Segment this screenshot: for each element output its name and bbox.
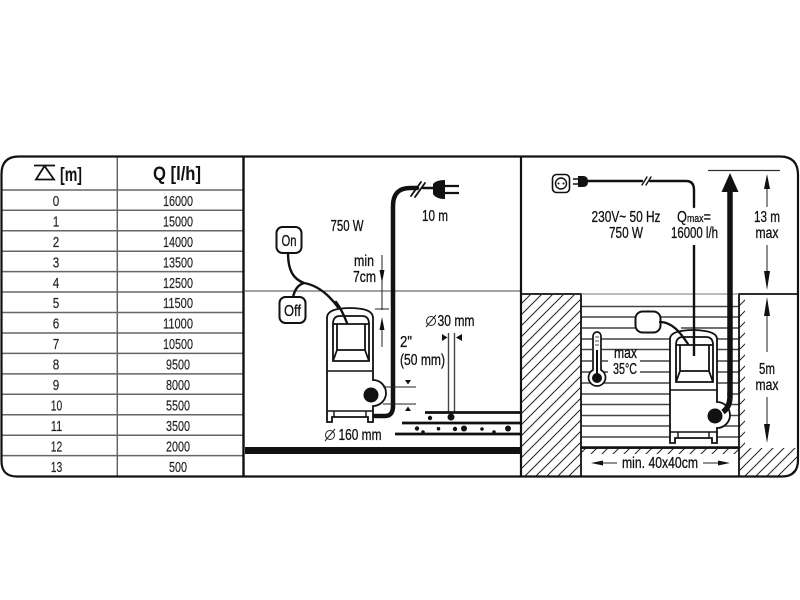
dimension: minimum basin size: min. 40x40cm — [622, 455, 698, 472]
inner float wire — [336, 302, 347, 323]
table column: head in metres: 7 — [53, 337, 59, 353]
table column: flow in litres per hour: 15000 — [163, 214, 193, 230]
dimension: min 7 cm — [353, 253, 389, 347]
table column: head in metres: 5 — [53, 296, 59, 312]
float switch Off — [280, 297, 306, 323]
label: max temperature: max — [614, 345, 637, 362]
ground hatching — [522, 295, 798, 476]
dimension: 5 m max: 5m — [759, 361, 775, 378]
label: cable length: 10 m — [422, 208, 448, 225]
pump — [327, 308, 386, 422]
table column: flow in litres per hour: 13500 — [163, 256, 193, 272]
basin outline — [522, 294, 798, 476]
table column: head in metres — [51, 194, 62, 476]
table column: flow in litres per hour: 12500 — [163, 276, 193, 292]
table column: flow in litres per hour: 9500 — [166, 358, 190, 374]
table column: flow in litres per hour: 2000 — [166, 440, 190, 456]
table column: flow in litres per hour: 8000 — [166, 378, 190, 394]
label: maximum flow: Qmax= — [677, 209, 711, 226]
table column: head in metres: 13 — [51, 460, 62, 476]
icon: water level triangle — [34, 166, 55, 180]
label: power: 750 W — [330, 218, 364, 235]
label: maximum flow: 16000 l/h — [671, 225, 718, 242]
dimension: 13 m max: max — [756, 225, 778, 242]
dimension: 5 m max: max — [756, 377, 778, 394]
dimension: minimum diameter 30 mm: 30 mm — [438, 313, 474, 330]
table column: flow in litres per hour: 500 — [169, 460, 187, 476]
table column: head in metres: 6 — [53, 316, 59, 332]
label: voltage and power: 750 W — [609, 225, 644, 242]
dimension: 13 m max — [754, 174, 780, 290]
dimension: 2 inch outlet — [383, 334, 445, 411]
table header: [m] — [60, 165, 82, 186]
label: voltage and power — [592, 209, 660, 242]
table column: head in metres: 2 — [53, 235, 59, 251]
float switch wires — [288, 253, 347, 323]
dimension: 2 inch outlet: 2" — [400, 334, 412, 351]
water level lines — [581, 306, 739, 437]
table column: head in metres: 12 — [51, 440, 62, 456]
table column: head in metres: 0 — [53, 194, 59, 210]
dimension: minimum diameter 30 mm — [426, 313, 474, 412]
dimension: 13 m max: 13 m — [754, 209, 780, 226]
table column: flow in litres per hour: 10500 — [163, 337, 193, 353]
icon: thermometer — [588, 332, 606, 386]
thick floor bar — [245, 447, 520, 454]
arrow: discharge head — [722, 173, 738, 412]
dimension: 5 m max — [756, 297, 778, 443]
float switch On — [276, 227, 302, 253]
table column: head in metres: 3 — [53, 256, 59, 272]
label: pump width 160 mm — [325, 427, 382, 444]
outer frame with panel dividers — [2, 156, 798, 477]
dimension: min 7 cm: min — [354, 253, 374, 270]
power cable into pump — [693, 245, 695, 356]
socket and plug cable — [552, 174, 694, 207]
table header: Q [l/h] — [153, 164, 201, 185]
label: max temperature — [613, 345, 637, 378]
table column: flow in litres per hour: 5500 — [166, 398, 190, 414]
table column: flow in litres per hour: 16000 — [163, 194, 193, 210]
float switch Off: Off — [284, 303, 301, 320]
label: max temperature: 35°C — [613, 361, 637, 378]
pump — [670, 330, 730, 443]
table column: flow in litres per hour: 14000 — [163, 235, 193, 251]
sediment layers — [395, 412, 520, 434]
table column: head in metres: 11 — [51, 419, 62, 435]
float wire — [660, 322, 688, 344]
label: maximum flow — [671, 209, 718, 242]
panel: flow table — [2, 157, 243, 476]
table column: head in metres: 8 — [53, 358, 59, 374]
table column: head in metres: 9 — [53, 378, 59, 394]
label: pump width 160 mm: 160 mm — [338, 427, 382, 444]
dimension: min 7 cm: 7cm — [353, 269, 376, 286]
table column: flow in litres per hour — [163, 194, 193, 476]
table column: head in metres: 4 — [53, 276, 59, 292]
panel: well installation — [522, 170, 798, 476]
table column: head in metres: 1 — [53, 214, 59, 230]
dimension: 2 inch outlet: (50 mm) — [400, 352, 445, 369]
table column: flow in litres per hour: 11000 — [163, 316, 193, 332]
height reference line — [708, 170, 780, 172]
table column: flow in litres per hour: 3500 — [166, 419, 190, 435]
table column: head in metres: 10 — [51, 398, 62, 414]
float switch On: On — [282, 233, 296, 250]
table column: flow in litres per hour: 11500 — [163, 296, 193, 312]
table header — [34, 164, 201, 186]
label: voltage and power: 230V~ 50 Hz — [592, 209, 660, 226]
float switch — [636, 312, 660, 332]
pump discharge cord with plug — [375, 180, 459, 416]
panel: installation with float switch — [245, 180, 520, 454]
